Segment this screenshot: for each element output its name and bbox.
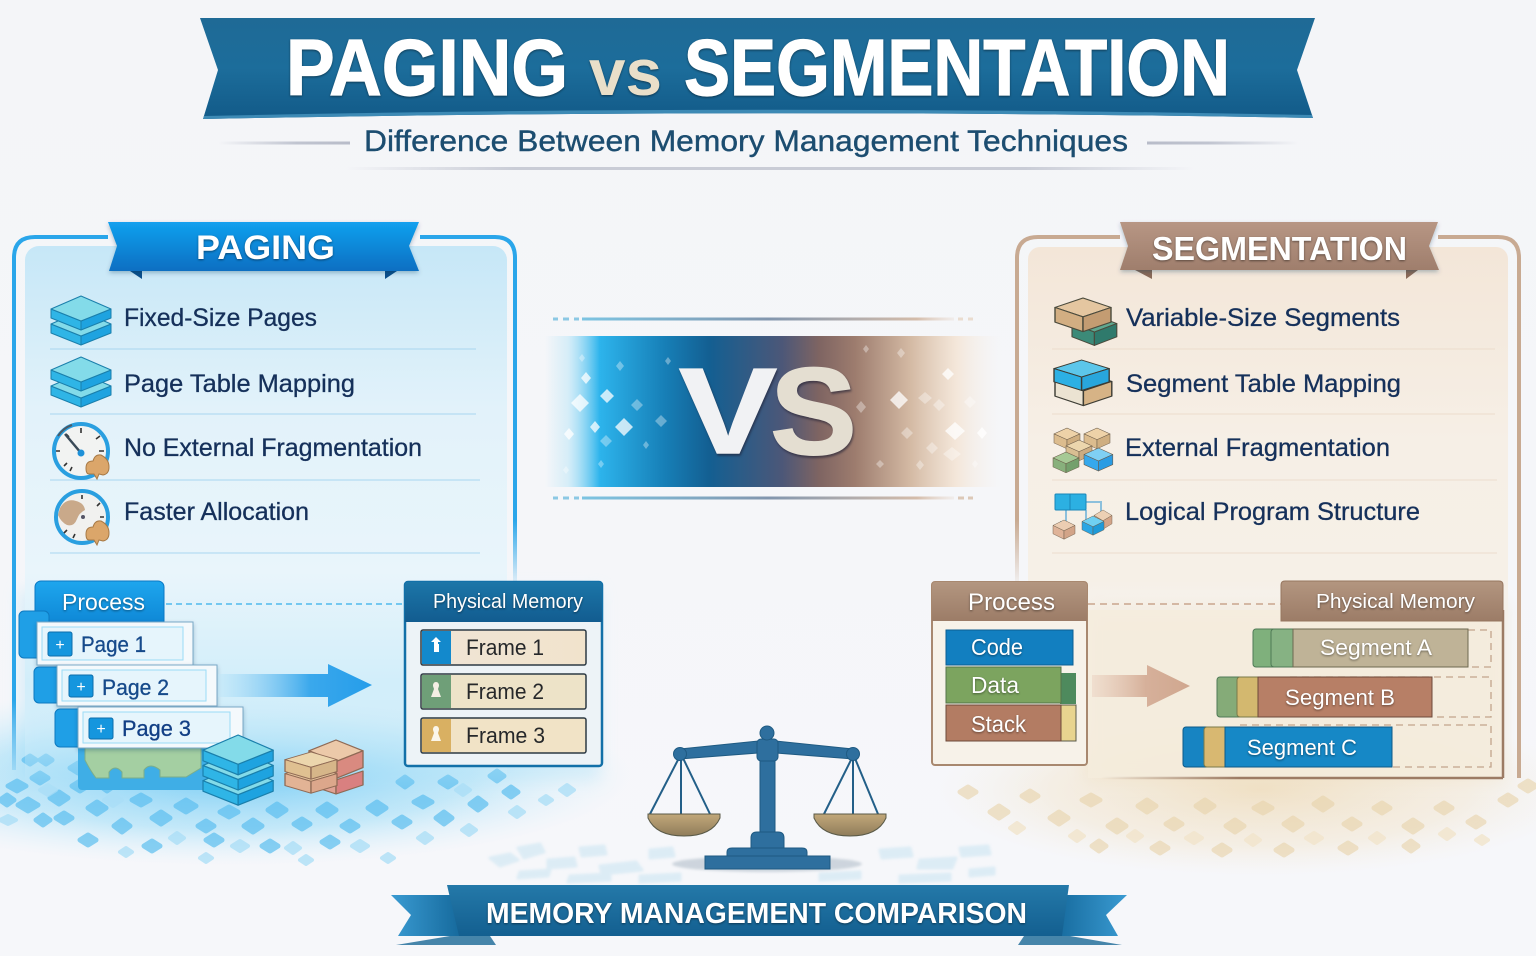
vs text (679, 343, 857, 481)
code block (946, 630, 1073, 665)
page 1: Page 1 (81, 632, 146, 657)
page 2: + (76, 679, 86, 696)
item text: Logical Program Structure (1125, 498, 1420, 526)
item text: No External Fragmentation (124, 434, 422, 462)
panel: paging (14, 222, 515, 792)
header (1281, 581, 1503, 621)
stack block (946, 705, 1076, 741)
item text: Page Table Mapping (124, 370, 355, 398)
vs panel (545, 318, 1001, 500)
item text: Variable-Size Segments (1126, 304, 1400, 332)
panel: segmentation physical memory (1088, 581, 1503, 778)
icon: stopwatch (56, 491, 109, 545)
frame 2 (421, 674, 586, 709)
title text: vs (589, 35, 662, 109)
icon: tan blocks (285, 740, 363, 794)
divider lines (1052, 349, 1497, 553)
page 3: Page 3 (122, 716, 191, 741)
panel banner: segmentation: SEGMENTATION (1152, 230, 1407, 267)
header (932, 582, 1087, 621)
sparkles (564, 368, 987, 440)
subtitle (218, 125, 1299, 170)
floor tiles under scale (490, 844, 994, 882)
soft color pools behind diagrams (0, 590, 1536, 875)
panel border (1017, 237, 1519, 778)
beam (680, 741, 853, 759)
left pan (648, 814, 720, 836)
page 2: Page 2 (102, 675, 169, 700)
arrow: paging (218, 664, 372, 707)
panel fill (25, 246, 507, 792)
frame 3 (421, 718, 586, 753)
base (751, 832, 784, 848)
frame 3: Frame 3 (466, 723, 545, 748)
process tab (35, 581, 164, 627)
item text: Segment Table Mapping (1126, 370, 1401, 398)
segment a: Segment A (1320, 635, 1432, 660)
segment c: Segment C (1247, 735, 1357, 760)
code block: Code (971, 634, 1023, 660)
icon: segment table mapping (1054, 360, 1112, 406)
scattered tan tiles (960, 781, 1536, 855)
bottom line (553, 496, 973, 500)
vs text: S (770, 343, 857, 481)
title text: SEGMENTATION (684, 23, 1230, 112)
vs text: V (679, 343, 777, 479)
pillar (760, 755, 775, 835)
icon: blue stack (203, 735, 273, 805)
icon: variable-size segments (1055, 298, 1117, 345)
frame 1 (421, 630, 586, 665)
title banner (200, 18, 1315, 119)
arrow: segmentation (1092, 665, 1190, 707)
page 1: + (55, 637, 65, 654)
gear base (78, 740, 210, 790)
icon: fragments (1053, 428, 1113, 473)
panel: segmentation process (932, 582, 1087, 765)
panel banner: paging: PAGING (196, 229, 335, 267)
icon: gauge (54, 424, 109, 479)
panel banner: paging (108, 222, 419, 279)
segment c (1183, 727, 1392, 767)
icon: fixed-size pages (51, 296, 111, 345)
dashed slots (1240, 630, 1491, 767)
stack block: Stack (971, 711, 1026, 737)
panel: segmentation (1017, 222, 1519, 778)
icon: logical structure (1053, 494, 1112, 539)
item text: Faster Allocation (124, 498, 309, 526)
frame 1: Frame 1 (466, 635, 544, 660)
data block: Data (971, 672, 1019, 698)
page 3: + (96, 721, 106, 738)
panel border (14, 237, 515, 770)
panel banner: segmentation (1120, 222, 1439, 279)
connector: segmentation dashed line (1088, 603, 1281, 605)
footer ribbon: MEMORY MANAGEMENT COMPARISON (486, 898, 1027, 930)
data block (946, 667, 1076, 704)
page 1 (19, 611, 193, 665)
connector: paging dashed line (166, 603, 402, 605)
process tab: Process (62, 589, 145, 615)
frame 2: Frame 2 (466, 679, 544, 704)
item text: Fixed-Size Pages (124, 304, 317, 332)
header: Physical Memory (1316, 591, 1475, 613)
icon: page table mapping (51, 357, 111, 407)
strings (650, 756, 878, 814)
right pan (814, 814, 886, 836)
segment b: Segment B (1285, 685, 1395, 710)
panel fill (1028, 247, 1508, 640)
panel: paging physical memory (405, 582, 602, 766)
header (405, 582, 602, 622)
page 2 (34, 665, 217, 706)
footer ribbon (391, 885, 1127, 945)
divider lines (50, 349, 480, 553)
segment b (1217, 677, 1432, 717)
ribbon tails (391, 895, 1127, 945)
icon: balance scale (648, 726, 886, 872)
item text: External Fragmentation (1125, 434, 1390, 462)
scattered blue tiles (0, 756, 518, 851)
paging process stack (19, 581, 363, 805)
header: Process (968, 589, 1055, 616)
title text (286, 23, 1230, 112)
title text: PAGING (286, 23, 568, 112)
top line (553, 318, 973, 320)
header: Physical Memory (433, 591, 583, 613)
segment a (1253, 629, 1468, 667)
page 3 (55, 707, 243, 748)
subtitle: Difference Between Memory Management Techniques (364, 125, 1128, 158)
